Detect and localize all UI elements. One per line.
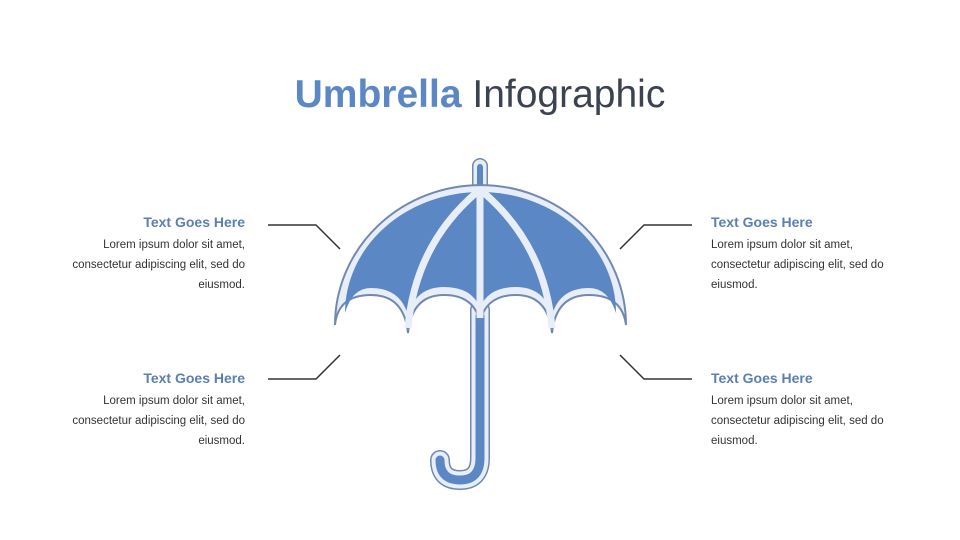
text block: top left: eiusmod.: [198, 279, 245, 291]
text block: top left: [72, 214, 245, 291]
text block: bottom right: [711, 370, 884, 447]
text block: top right: Text Goes Here: [711, 214, 813, 230]
text block: bottom left: Lorem ipsum dolor sit amet,: [103, 395, 245, 407]
text block: bottom left: eiusmod.: [198, 435, 245, 447]
text block: top left: Lorem ipsum dolor sit amet,: [103, 239, 245, 251]
text block: top left: Text Goes Here: [143, 214, 245, 230]
text block: top right: consectetur adipiscing elit, sed do: [711, 259, 884, 271]
icon: umbrella handle: [440, 166, 480, 480]
text block: top right: Lorem ipsum dolor sit amet,: [711, 239, 853, 251]
text block: bottom left: consectetur adipiscing elit, sed do: [72, 415, 245, 427]
text block: bottom right: eiusmod.: [711, 435, 758, 447]
text block: top right: eiusmod.: [711, 279, 758, 291]
text block: bottom left: [72, 370, 245, 447]
title: Umbrella Infographic: [295, 73, 665, 116]
text block: bottom right: Lorem ipsum dolor sit amet,: [711, 395, 853, 407]
connector lines: [268, 225, 692, 379]
text block: top right: [711, 214, 884, 291]
text block: bottom left: Text Goes Here: [143, 370, 245, 386]
text block: bottom right: Text Goes Here: [711, 370, 813, 386]
icon: umbrella canopy: [335, 185, 626, 333]
text block: bottom right: consectetur adipiscing elit, sed do: [711, 415, 884, 427]
text block: top left: consectetur adipiscing elit, sed do: [72, 259, 245, 271]
